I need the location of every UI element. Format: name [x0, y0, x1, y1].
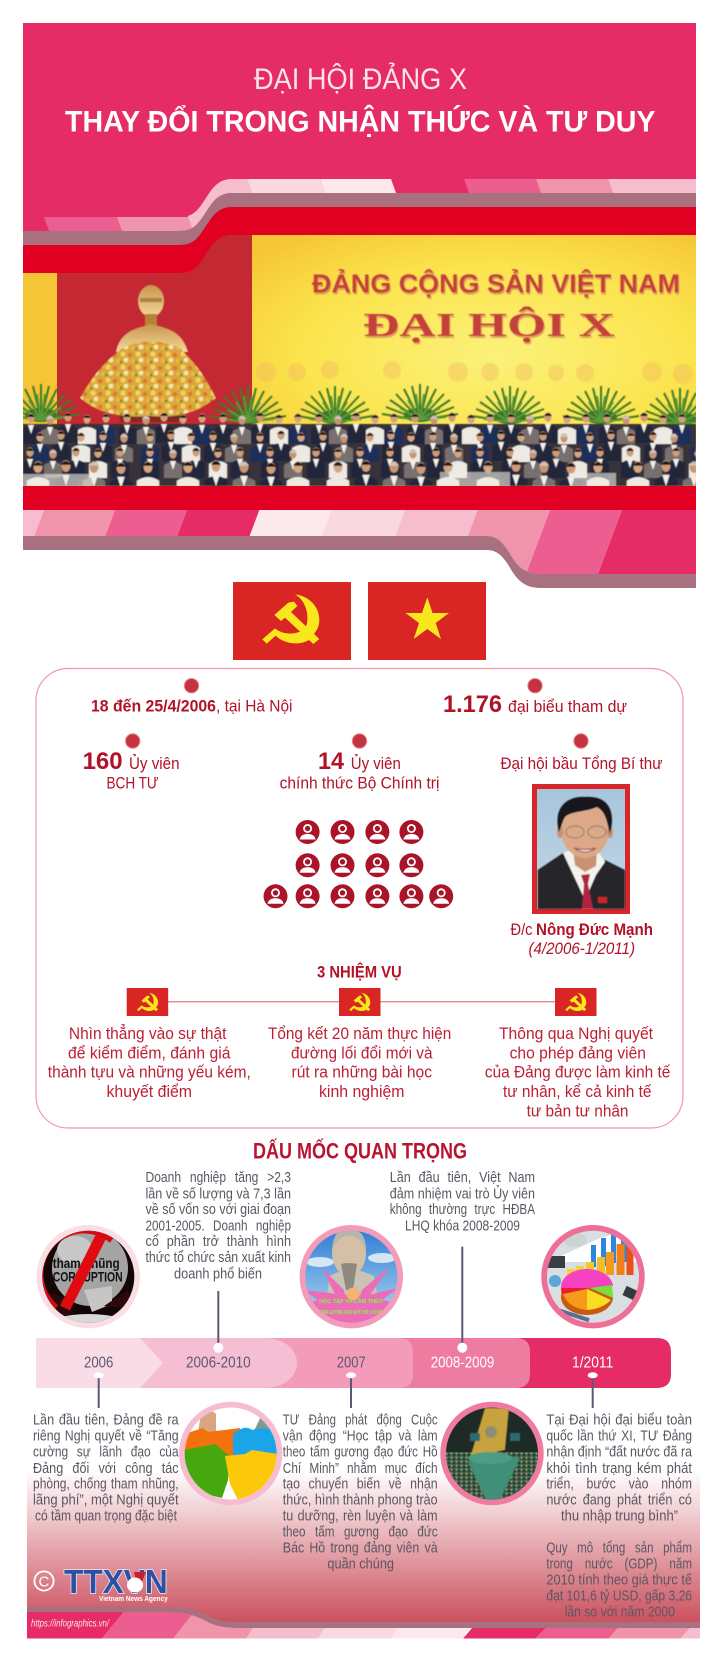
task two: rút ra những bài học: [292, 1063, 432, 1082]
fact: dates: 18 đến 25/4/2006: [91, 697, 216, 716]
text: UN Security Council: không thường trực HĐBA: [390, 1202, 535, 1218]
flag: Vietnam: [368, 582, 486, 660]
fact: general secretary: Đại hội bầu Tổng Bí thư: [500, 754, 662, 773]
source url: https://infographics.vn/: [31, 1619, 110, 1630]
heading: milestones: DẤU MỐC QUAN TRỌNG: [253, 1138, 467, 1164]
logo: TTXVN: TTXVN: [64, 1563, 168, 1600]
fact: delegates: [443, 678, 627, 718]
banner text on wall: [312, 268, 681, 346]
fact: dates: [91, 678, 292, 716]
palm plants: [3, 384, 718, 426]
panel: congress facts: [36, 668, 683, 1128]
timeline bar: [36, 1338, 671, 1388]
image: Ho Chi Minh with lotus: [300, 1225, 403, 1328]
text: 11th congress assessment: Tại Đại hội đại biểu toàn: [546, 1413, 692, 1429]
task two: Tổng kết 20 năm thực hiện: [268, 1024, 451, 1043]
portrait: Nong Duc Manh: (4/2006-1/2011): [528, 939, 635, 958]
task three: Thông qua Nghị quyết: [499, 1024, 653, 1043]
timeline connectors: [94, 1247, 598, 1408]
tasks connector and flags: [127, 988, 596, 1016]
text: study Ho Chi Minh campaign: Bác Hồ trong đảng viên và: [283, 1541, 438, 1557]
task two: kinh nghiệm: [319, 1082, 404, 1101]
crowd of delegates: [23, 410, 696, 486]
text: study Ho Chi Minh campaign: tạo chuyển biến về nhận: [283, 1477, 438, 1493]
flower arrangement: [80, 342, 216, 422]
banner text on wall: ĐẢNG CỘNG SẢN VIỆT NAM: [312, 268, 680, 298]
heading: 3 tasks: 3 NHIỆM VỤ: [317, 962, 402, 981]
task three: tư bản tư nhân: [527, 1101, 628, 1120]
task one: thành tựu và những yếu kém,: [48, 1063, 251, 1082]
fact: delegates: 1.176: [443, 691, 502, 718]
task one: khuyết điểm: [106, 1082, 192, 1101]
fact: dates: , tại Hà Nội: [216, 697, 292, 716]
lower ribbon strip: [0, 510, 696, 574]
fact: central committee: 160: [83, 748, 123, 775]
year labels: 1/2011: [572, 1354, 613, 1371]
text: 11th congress assessment: quốc lần thứ XI, TƯ Đảng: [546, 1428, 692, 1444]
image: anti-corruption: [37, 1225, 140, 1328]
portrait: Nong Duc Manh: Nông Đức Mạnh: [536, 920, 653, 939]
text: UN Security Council: Lần đầu tiên, Việt Nam: [390, 1170, 535, 1186]
fact: politburo: chính thức Bộ Chính trị: [280, 773, 439, 792]
text: anti-corruption resolution: Lần đầu tiên, Đảng đề ra: [33, 1413, 179, 1429]
text: study Ho Chi Minh campaign: quần chúng: [327, 1557, 394, 1573]
banner text on wall: ĐẠI HỘI X: [364, 308, 617, 346]
portrait: Nong Duc Manh: Đ/c: [510, 920, 533, 939]
text: study Ho Chi Minh campaign: Chí Minh” nhằm mục đích: [283, 1460, 438, 1477]
lower grey band: [23, 536, 696, 588]
small lotus caption: HỌC TẬP VÀ LÀM THEO: [319, 1298, 384, 1305]
flag: Communist Party: [233, 582, 351, 660]
task two: [268, 1024, 451, 1101]
logo: TTXVN: C: [38, 1574, 50, 1590]
task two: đường lối đổi mới và: [291, 1043, 433, 1062]
text: GDP 2010: đạt 101,6 tỷ USD, gấp 3,26: [546, 1588, 692, 1604]
header panel: [23, 23, 696, 238]
task one: Nhìn thẳng vào sự thật: [69, 1024, 227, 1043]
text: UN Security Council: đảm nhiệm vai trò Ủy viên: [390, 1184, 535, 1202]
portrait: Nong Duc Manh: [510, 784, 653, 958]
fact: central committee: [83, 734, 180, 792]
text: UN Security Council: LHQ khóa 2008-2009: [405, 1218, 520, 1234]
fact: politburo: 14: [318, 748, 345, 775]
text: study Ho Chi Minh campaign: tu dưỡng, rèn luyện và làm: [283, 1509, 438, 1525]
text: enterprises 2006-2010: cổ phần trở thành hình: [146, 1234, 291, 1250]
text: enterprises 2006-2010: về số vốn so với giai đoạn: [146, 1202, 291, 1218]
lower red band: [23, 486, 696, 510]
fact: delegates: đại biểu tham dự: [508, 697, 627, 716]
text: enterprises 2006-2010: thức tổ chức sản xuất kinh: [146, 1250, 291, 1266]
footer ribbon strip: [27, 1612, 700, 1638]
text: 11th congress assessment: nhận định “đất nước đã ra: [546, 1445, 693, 1461]
text: 11th congress assessment: thu nhập trung bình”: [561, 1509, 678, 1525]
text: 11th congress assessment: triển, bước vào nhóm: [546, 1477, 692, 1493]
text: study Ho Chi Minh campaign: vận động “Học tập và làm: [283, 1428, 438, 1444]
text: study Ho Chi Minh campaign: theo tấm gương đạo đức: [283, 1525, 438, 1541]
logo: TTXVN: Vietnam News Agency: [99, 1594, 168, 1603]
task three: cho phép đảng viên: [510, 1043, 646, 1062]
text: enterprises 2006-2010: [146, 1170, 291, 1282]
image: UN general assembly hall: [440, 1402, 544, 1505]
year labels: [84, 1354, 613, 1371]
text: GDP 2010: 2010 tính theo giá thực tế: [546, 1572, 692, 1588]
text: anti-corruption resolution: cường sự lãnh đạo của: [33, 1445, 179, 1461]
text: 11th congress assessment: khỏi tình trạng kém phát: [546, 1461, 692, 1477]
task three: [485, 1024, 671, 1120]
small lotus caption: [319, 1298, 386, 1316]
banner text on wall: ĐẠI HỘI X: [363, 306, 616, 344]
task one: để kiểm điểm, đánh giá: [68, 1043, 231, 1062]
text: enterprises 2006-2010: 2001-2005. Doanh nghiệp: [146, 1218, 291, 1234]
banner text on wall: ĐẢNG CỘNG SẢN VIỆT NAM: [313, 270, 681, 300]
text: anti-corruption resolution: lãng phí”, một Nghị quyết: [33, 1492, 179, 1508]
fact: politburo: [280, 734, 439, 792]
year labels: 2007: [337, 1354, 366, 1371]
year labels: 2006: [84, 1354, 113, 1371]
small lotus caption: TẤM GƯƠNG ĐẠO ĐỨC HỒ CHÍ MINH: [320, 1308, 386, 1316]
text: anti-corruption resolution: có tầm quan trọng đặc biệt: [35, 1509, 177, 1525]
title line one: ĐẠI HỘI ĐẢNG X: [254, 62, 467, 96]
image: anti-corruption: tham nhũng: [53, 1255, 120, 1271]
text: 11th congress assessment: nước đang phát triển có: [546, 1492, 692, 1508]
year labels: 2008-2009: [431, 1354, 494, 1371]
image: puzzle pieces: [179, 1402, 282, 1505]
text: enterprises 2006-2010: doanh phổ biến: [174, 1266, 262, 1282]
title line two: THAY ĐỔI TRONG NHẬN THỨC VÀ TƯ DUY: [65, 104, 656, 138]
congress photo: [3, 235, 718, 486]
text: anti-corruption resolution: riêng Nghị quyết về “Tăng: [33, 1428, 179, 1444]
text: study Ho Chi Minh campaign: [283, 1413, 438, 1573]
text: study Ho Chi Minh campaign: theo tấm gương đạo đức Hồ: [283, 1445, 438, 1461]
image: economy charts: [541, 1225, 645, 1328]
icons: 14 politburo members: [264, 820, 453, 908]
image: anti-corruption: CORRUPTION: [53, 1269, 123, 1285]
text: 11th congress assessment: [546, 1413, 693, 1525]
year labels: 2006-2010: [186, 1354, 251, 1371]
bottom gradient background: [27, 1470, 700, 1623]
text: GDP 2010: lần so với năm 2000: [565, 1604, 675, 1620]
upper red band: [23, 207, 696, 273]
text: UN Security Council: [390, 1170, 535, 1234]
Ho Chi Minh bust: [116, 285, 188, 352]
task three: tư nhân, kể cả kinh tế: [503, 1082, 652, 1101]
fact: central committee: BCH TƯ: [106, 773, 158, 792]
task three: của Đảng được làm kinh tế: [485, 1063, 671, 1082]
upper grey band: [23, 193, 696, 245]
text: anti-corruption resolution: phòng, chống tham nhũng,: [33, 1477, 179, 1493]
text: study Ho Chi Minh campaign: thức, hình thành phong trào: [283, 1492, 438, 1508]
upper ribbon strip: [44, 179, 696, 231]
task one: [48, 1024, 251, 1101]
fact: general secretary: [500, 734, 662, 773]
text: study Ho Chi Minh campaign: TƯ Đảng phát động Cuộc: [283, 1413, 438, 1429]
text: anti-corruption resolution: [33, 1413, 179, 1525]
text: enterprises 2006-2010: Doanh nghiệp tăng >2,3: [146, 1170, 291, 1186]
text: GDP 2010: [546, 1541, 692, 1620]
text: anti-corruption resolution: Đảng đối với công tác: [33, 1461, 179, 1477]
fact: central committee: Ủy viên: [129, 754, 180, 773]
fact: politburo: Ủy viên: [351, 754, 401, 773]
text: enterprises 2006-2010: lần về số lượng và 7,3 lần: [146, 1186, 291, 1202]
footer grey band: [27, 1607, 700, 1628]
